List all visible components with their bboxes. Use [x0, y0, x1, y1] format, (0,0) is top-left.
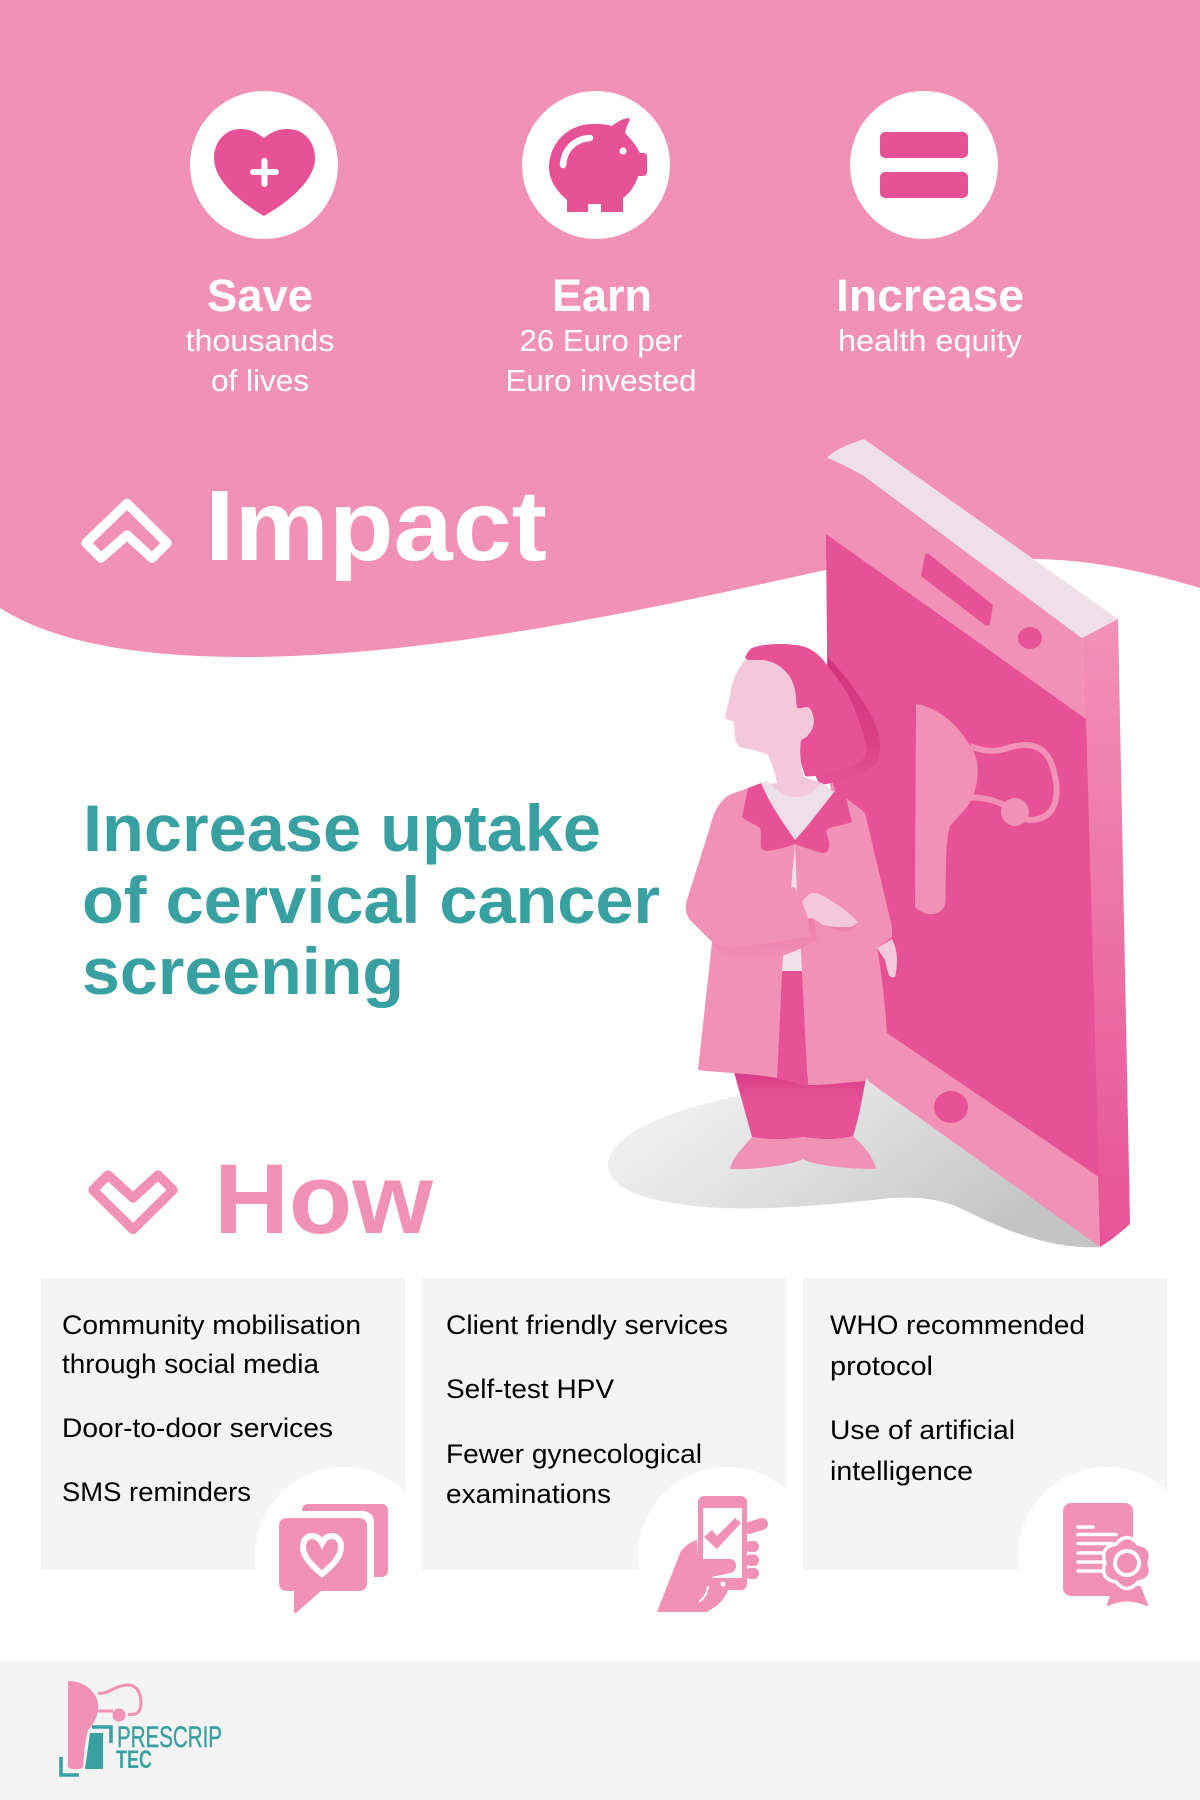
section heading: How [93, 1143, 434, 1254]
text: thousands of lives: of lives [211, 363, 309, 398]
hand shadow [812, 915, 858, 932]
panel text: Use of artificial [830, 1415, 1015, 1445]
panel text: Self-test HPV [446, 1374, 614, 1404]
logo wordmark second line: TEC [116, 1746, 152, 1774]
panel background [803, 1278, 1167, 1570]
shoes [730, 1136, 876, 1169]
shirt lower [782, 930, 802, 972]
text: 26 Euro per Euro invested: Euro invested [506, 363, 696, 398]
icon: heart with plus [190, 91, 338, 239]
text: thousands of lives: thousands [186, 323, 334, 358]
panel text: examinations [446, 1479, 611, 1509]
panel: services [422, 1278, 816, 1645]
heading: Increase: Increase [836, 270, 1024, 321]
legs [734, 1072, 866, 1139]
section heading: Impact [86, 470, 547, 582]
panel text: Door-to-door services [62, 1413, 333, 1443]
main heading: Increase uptake [83, 791, 601, 865]
panel text: intelligence [830, 1456, 973, 1486]
panel text [830, 1310, 1085, 1486]
text: 26 Euro per Euro invested: 26 Euro per [520, 323, 682, 358]
phone top edge [827, 439, 1118, 638]
main heading: screening [82, 934, 404, 1008]
collar [742, 783, 852, 853]
main heading [82, 791, 660, 1008]
logo uterus mark [68, 1681, 141, 1769]
illustration: woman in coat [686, 644, 897, 1169]
heading: Save: Save [207, 270, 313, 321]
hair shadow [816, 657, 880, 785]
footer band [0, 1661, 1200, 1800]
impact item: increase equity [836, 91, 1024, 358]
logo teal block [85, 1733, 103, 1769]
panel text: Fewer gynecological [446, 1439, 702, 1469]
coat [686, 788, 892, 1085]
impact item: earn [506, 91, 696, 398]
trousers centre [777, 971, 808, 1086]
icon: chevron up [86, 504, 167, 558]
icon: equals sign [850, 91, 998, 239]
phone camera [1018, 627, 1042, 649]
text: health equity: health equity [838, 323, 1023, 358]
phone screen [826, 534, 1099, 1177]
icon: uterus on screen [915, 704, 1057, 914]
logo teal brackets [61, 1727, 111, 1775]
phone side edge [1082, 619, 1130, 1247]
icon: chat bubbles with heart [255, 1467, 433, 1645]
panel text: SMS reminders [62, 1477, 251, 1507]
main heading: of cervical cancer [82, 863, 660, 937]
face and neck [725, 660, 822, 800]
panel text: through social media [62, 1349, 320, 1379]
text: thousands of lives [186, 323, 334, 398]
logo: Prescrip Tec [61, 1681, 222, 1775]
panel text [446, 1310, 728, 1509]
panel background [422, 1278, 786, 1570]
phone speaker [921, 554, 993, 626]
panel text: Community mobilisation [62, 1310, 361, 1340]
shirt neckline [761, 781, 834, 840]
heading text: Impact: Impact [205, 470, 547, 582]
icon: chevron down [93, 1175, 173, 1230]
pink wave header background [0, 0, 1200, 657]
text: 26 Euro per Euro invested [506, 323, 696, 398]
arm shadow [712, 918, 817, 963]
panel text [62, 1310, 361, 1507]
panel text: Client friendly services [446, 1310, 728, 1340]
icon: hand holding phone with check [638, 1467, 816, 1645]
illustration: smartphone [826, 439, 1130, 1247]
heading: Earn: Earn [552, 270, 652, 321]
shirt placket [791, 844, 797, 893]
icon: certificate with rosette [1018, 1467, 1196, 1645]
phone home button [934, 1091, 968, 1123]
impact item: save lives [186, 91, 338, 398]
right hand [877, 939, 897, 977]
panel: protocol [803, 1278, 1196, 1645]
logo wordmark: PRESCRIP [117, 1721, 222, 1754]
hair [745, 644, 866, 776]
phone front upper body [827, 458, 1100, 1247]
forearm sleeve [695, 860, 811, 948]
hand across body [802, 893, 858, 927]
illustration: ground shadow [608, 1060, 1100, 1247]
icon: piggy bank [522, 91, 670, 239]
heading text: How: How [214, 1143, 434, 1254]
panel text: protocol [830, 1351, 933, 1381]
panel: outreach [41, 1278, 433, 1645]
panel text: WHO recommended [830, 1310, 1085, 1340]
panel background [41, 1278, 405, 1570]
